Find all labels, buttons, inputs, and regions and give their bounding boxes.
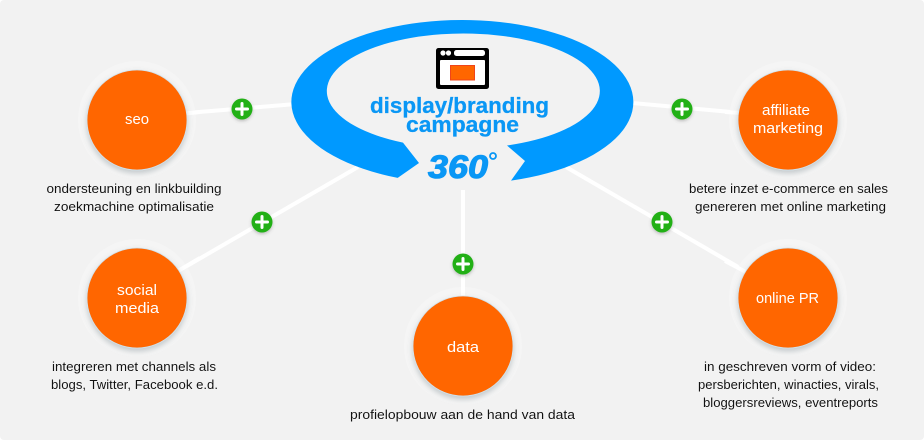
icon: plus seo bbox=[232, 98, 252, 120]
description: seo: zoekmachine optimalisatie bbox=[54, 199, 214, 214]
node: data bbox=[404, 280, 522, 405]
node: seo: seo bbox=[125, 112, 149, 128]
connector lines bbox=[180, 103, 745, 300]
title bbox=[370, 93, 549, 137]
icon: plus social media bbox=[252, 212, 272, 232]
node: affiliate marketing: marketing bbox=[753, 121, 823, 137]
node: social media: social bbox=[117, 283, 157, 299]
title: display/branding bbox=[370, 93, 549, 118]
description: social media: blogs, Twitter, Facebook e.d. bbox=[51, 377, 218, 392]
description: online PR: in geschreven vorm of video: bbox=[704, 359, 876, 374]
description: online PR: persberichten, winacties, virals, bbox=[698, 377, 879, 392]
360 degrees label: 360 bbox=[428, 149, 488, 185]
description: seo bbox=[46, 181, 222, 214]
description: social media: integreren met channels als bbox=[52, 359, 217, 374]
description: affiliate marketing bbox=[689, 181, 889, 214]
description: social media bbox=[51, 359, 218, 392]
description: affiliate marketing: betere inzet e-commerce en sales bbox=[689, 181, 889, 196]
title: campagne bbox=[406, 112, 519, 137]
ring arrow bbox=[291, 20, 633, 181]
node: social media: media bbox=[115, 301, 160, 317]
node: affiliate marketing: affiliate bbox=[762, 103, 810, 119]
description: online PR bbox=[698, 359, 879, 410]
node: online PR bbox=[725, 239, 847, 357]
icon: plus online PR bbox=[652, 212, 672, 232]
node: data: data bbox=[447, 340, 480, 356]
node: social media bbox=[78, 239, 200, 357]
node: online PR: online PR bbox=[756, 291, 819, 307]
icon: browser window bbox=[436, 48, 489, 89]
description: seo: ondersteuning en linkbuilding bbox=[46, 181, 222, 196]
node: seo bbox=[78, 61, 200, 179]
description: data: profielopbouw aan de hand van data bbox=[350, 407, 576, 422]
icon: plus data bbox=[452, 254, 474, 274]
icon: plus affiliate marketing bbox=[672, 98, 692, 120]
node: affiliate marketing bbox=[725, 61, 847, 179]
description: affiliate marketing: genereren met online marketing bbox=[695, 199, 886, 214]
description: online PR: bloggersreviews, eventreports bbox=[703, 395, 879, 410]
